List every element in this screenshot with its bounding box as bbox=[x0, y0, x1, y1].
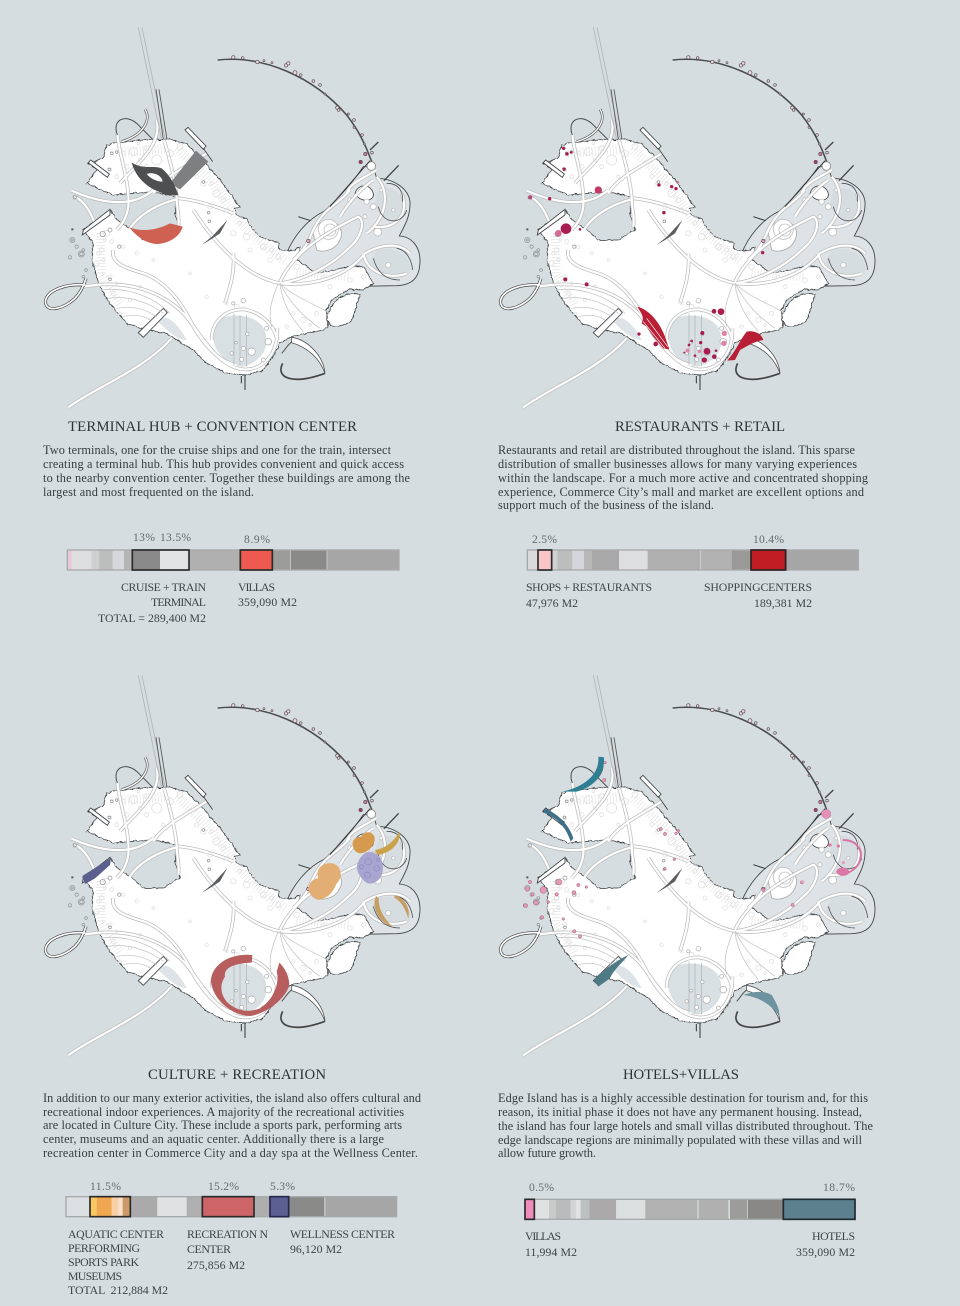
label: villas: VILLAS bbox=[238, 580, 275, 594]
highlight: shopping centers bbox=[637, 307, 763, 361]
title: TERMINAL HUB + CONVENTION CENTER bbox=[68, 419, 357, 435]
text block: description: recreational indoor experiences. A majority of the recreational activities bbox=[43, 1105, 404, 1119]
label: recreation center: CENTER bbox=[187, 1242, 231, 1256]
label: recreation center: 275,856 M2 bbox=[187, 1258, 245, 1272]
label: shopping centers: SHOPPINGCENTERS bbox=[704, 580, 812, 594]
bar chart: land use share bbox=[66, 1180, 397, 1217]
highlight: hotels bbox=[543, 757, 779, 1017]
text block: description: recreation center in Commerce City and a day spa at the Wellness Center. bbox=[43, 1146, 418, 1160]
label: cruise + train terminal: CRUISE + TRAIN bbox=[121, 580, 206, 594]
label: villas: 11,994 M2 bbox=[525, 1245, 577, 1259]
dots: villas bbox=[524, 761, 804, 938]
label: shops + restaurants bbox=[526, 580, 652, 610]
label: villas: 359,090 M2 bbox=[238, 595, 297, 609]
label: aquatic, performing, sports, museums: SPORTS PARK bbox=[68, 1255, 139, 1269]
title: CULTURE + RECREATION bbox=[148, 1067, 326, 1083]
bar chart: land use share: 13% bbox=[133, 531, 155, 544]
text block: description bbox=[498, 1091, 874, 1160]
label: aquatic, performing, sports, museums: AQUATIC CENTER bbox=[68, 1227, 164, 1241]
text block: description: Two terminals, one for the cruise ships and one for the train, intersect bbox=[43, 443, 392, 457]
highlight: wellness pink bbox=[801, 809, 861, 884]
bar chart: land use share: 15.2% bbox=[208, 1180, 239, 1193]
text block: description: edge landscape regions are minimally populated with these villas and will bbox=[498, 1133, 863, 1147]
text block: description: Restaurants and retail are distributed throughout the island. This sparse bbox=[498, 443, 856, 457]
label: aquatic, performing, sports, museums: TOTAL 212,884 M2 bbox=[68, 1283, 168, 1297]
label: cruise + train terminal: TOTAL = 289,400 M2 bbox=[98, 611, 206, 625]
panel: restaurants + retail bbox=[498, 27, 875, 610]
label: recreation center bbox=[187, 1227, 268, 1272]
label: wellness center bbox=[290, 1227, 395, 1256]
title: RESTAURANTS + RETAIL bbox=[615, 419, 785, 435]
label: aquatic, performing, sports, museums bbox=[68, 1227, 168, 1297]
bar chart: land use share bbox=[527, 533, 858, 570]
text block: description: largest and most frequented on the island. bbox=[43, 485, 254, 499]
bar chart: land use share: 2.5% bbox=[532, 533, 557, 546]
text block: description bbox=[498, 443, 868, 512]
text block: description: Edge Island has is a highly accessible destination for tourism and, for this bbox=[498, 1091, 868, 1105]
text block: description: creating a terminal hub. This hub provides convenient and quick access bbox=[43, 457, 404, 471]
highlight: aquatic center bbox=[357, 852, 383, 884]
label: hotels: HOTELS bbox=[812, 1229, 855, 1243]
highlight: performing arts bbox=[353, 832, 375, 853]
text block: description: are located in Culture City. These include a sports park, performing arts bbox=[43, 1118, 402, 1132]
bar chart: land use share: 0.5% bbox=[529, 1181, 554, 1194]
label: aquatic, performing, sports, museums: PERFORMING bbox=[68, 1241, 140, 1255]
label: aquatic, performing, sports, museums: MUSEUMS bbox=[68, 1269, 122, 1283]
text block: description bbox=[43, 443, 411, 499]
label: hotels bbox=[796, 1229, 855, 1259]
bar chart: land use share: 8.9% bbox=[244, 533, 270, 546]
bar chart: land use share: 11.5% bbox=[90, 1180, 121, 1193]
highlight: wellness center bbox=[82, 858, 110, 884]
bar chart: land use share: 18.7% bbox=[823, 1181, 855, 1194]
highlight: terminal buildings bbox=[132, 151, 208, 195]
bar chart: land use share: 5.3% bbox=[270, 1180, 295, 1193]
text block: description: reason, its initial phase it does not have any permanent housing. Instead, bbox=[498, 1105, 862, 1119]
map: island with retail highlights bbox=[500, 27, 875, 407]
label: shops + restaurants: SHOPS + RESTAURANTS bbox=[526, 580, 652, 594]
text block: description: the island has four large hotels and small villas distributed throughout. The bbox=[498, 1119, 874, 1133]
highlight: lower arcs bbox=[374, 895, 409, 927]
label: shopping centers bbox=[704, 580, 812, 610]
label: shops + restaurants: 47,976 M2 bbox=[526, 596, 578, 610]
label: cruise + train terminal: TERMINAL bbox=[151, 595, 206, 609]
bar chart: land use share: 10.4% bbox=[753, 533, 784, 546]
highlight: recreation center bbox=[211, 955, 289, 1016]
bar chart: land use share bbox=[67, 531, 399, 570]
bar chart: land use share bbox=[525, 1181, 855, 1219]
highlight: museum crescent bbox=[375, 832, 400, 855]
dots: shops and restaurants bbox=[528, 147, 764, 363]
text block: description: experience, Commerce City’s mall and market are excellent options and bbox=[498, 485, 864, 499]
label: wellness center: WELLNESS CENTER bbox=[290, 1227, 395, 1241]
text block: description bbox=[43, 1091, 421, 1160]
panel: hotels + villas bbox=[498, 675, 875, 1259]
panel: culture + recreation bbox=[43, 675, 421, 1297]
text block: description: to the nearby convention center. Together these buildings are among the bbox=[43, 471, 411, 485]
bar chart: land use share: 13.5% bbox=[160, 531, 191, 544]
panel: terminal hub + convention center bbox=[43, 27, 420, 625]
text block: description: within the landscape. For a much more active and concentrated shopping bbox=[498, 471, 868, 485]
label: shopping centers: 189,381 M2 bbox=[754, 596, 812, 610]
map: island with terminal hub highlights bbox=[45, 27, 420, 407]
label: cruise + train terminal bbox=[98, 580, 206, 625]
title: HOTELS+VILLAS bbox=[623, 1067, 739, 1083]
map: island with culture highlights bbox=[45, 675, 420, 1055]
map: island with hotel highlights bbox=[500, 675, 875, 1055]
label: villas bbox=[525, 1229, 577, 1259]
label: recreation center: RECREATION N bbox=[187, 1227, 268, 1241]
highlight: sports park bbox=[308, 863, 341, 900]
text block: description: allow future growth. bbox=[498, 1146, 596, 1160]
text block: description: support much of the business of the island. bbox=[498, 498, 714, 512]
label: villas bbox=[238, 580, 297, 609]
text block: description: center, museums and an aquatic center. Additionally there is a large bbox=[43, 1132, 385, 1146]
label: wellness center: 96,120 M2 bbox=[290, 1242, 342, 1256]
highlight: villas red bbox=[129, 223, 183, 244]
text block: description: In addition to our many exterior activities, the island also offers cultural and bbox=[43, 1091, 421, 1105]
text block: description: distribution of smaller businesses allows for many varying experiences bbox=[498, 457, 857, 471]
label: hotels: 359,090 M2 bbox=[796, 1245, 855, 1259]
label: villas: VILLAS bbox=[525, 1229, 561, 1243]
